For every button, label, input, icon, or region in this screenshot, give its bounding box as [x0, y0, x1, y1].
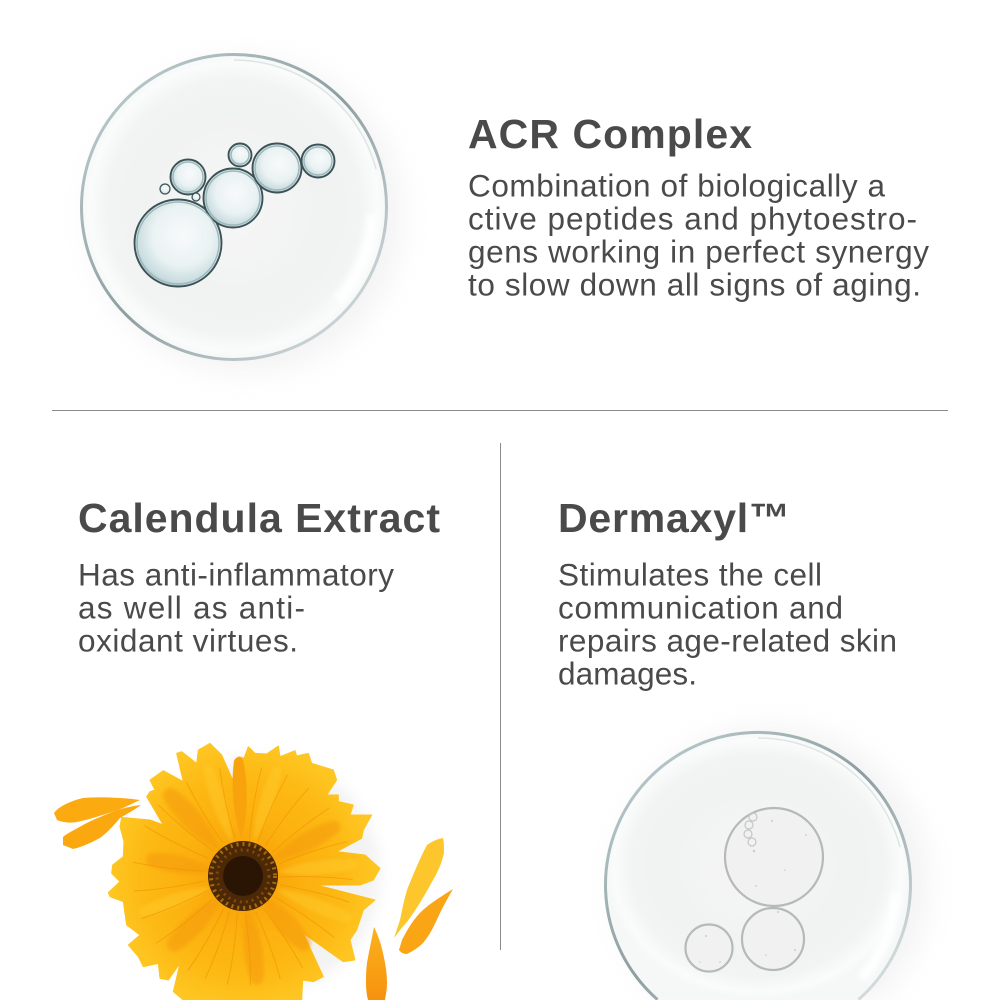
- clear gel droplets: [686, 808, 823, 972]
- calendula flower: [108, 743, 380, 1000]
- text block: Calendula description: oxidant virtues.: [78, 622, 298, 658]
- tiny air bubbles: [744, 813, 757, 846]
- loose petal: pale yellow: [394, 838, 444, 938]
- text block: Calendula description: [78, 556, 394, 658]
- text block: ACR Complex description: gens working in perfect synergy: [468, 234, 929, 270]
- text block: Dermaxyl description: repairs age-related skin: [558, 622, 897, 658]
- loose petals upper left: [54, 797, 141, 849]
- text block: Dermaxyl description: Stimulates the cell: [558, 556, 822, 592]
- petri dish: ACR Complex bubbles: [81, 54, 400, 370]
- text block: Calendula description: as well as anti-: [78, 590, 305, 626]
- flower centre: [208, 841, 278, 911]
- text block: Dermaxyl description: communication and: [558, 590, 843, 626]
- text block: ACR Complex description: to slow down all signs of aging.: [468, 266, 921, 302]
- flower silhouette: [108, 743, 380, 1000]
- heading: Calendula Extract: Calendula Extract: [78, 495, 440, 541]
- text block: ACR Complex description: [468, 168, 929, 302]
- petal veins: [133, 767, 353, 985]
- text block: Dermaxyl description: damages.: [558, 656, 697, 692]
- loose petal: orange: [399, 889, 453, 954]
- petal shading: [133, 757, 358, 985]
- bubbles: oil droplets: [134, 144, 334, 286]
- droplet specks: [699, 820, 807, 963]
- heading: ACR Complex: ACR Complex: [468, 111, 752, 157]
- petri dish: Dermaxyl droplets: [605, 730, 926, 1000]
- heading: Dermaxyl: Dermaxyl™: [558, 495, 790, 541]
- text block: ACR Complex description: Combination of biologically a: [468, 168, 885, 204]
- vertical divider: [500, 443, 501, 950]
- loose petal: bottom orange: [366, 927, 387, 1000]
- horizontal divider: [52, 410, 948, 411]
- text block: Dermaxyl description: [558, 556, 897, 692]
- text block: Calendula description: Has anti-inflammatory: [78, 556, 394, 592]
- text block: ACR Complex description: ctive peptides and phytoestro-: [468, 200, 917, 236]
